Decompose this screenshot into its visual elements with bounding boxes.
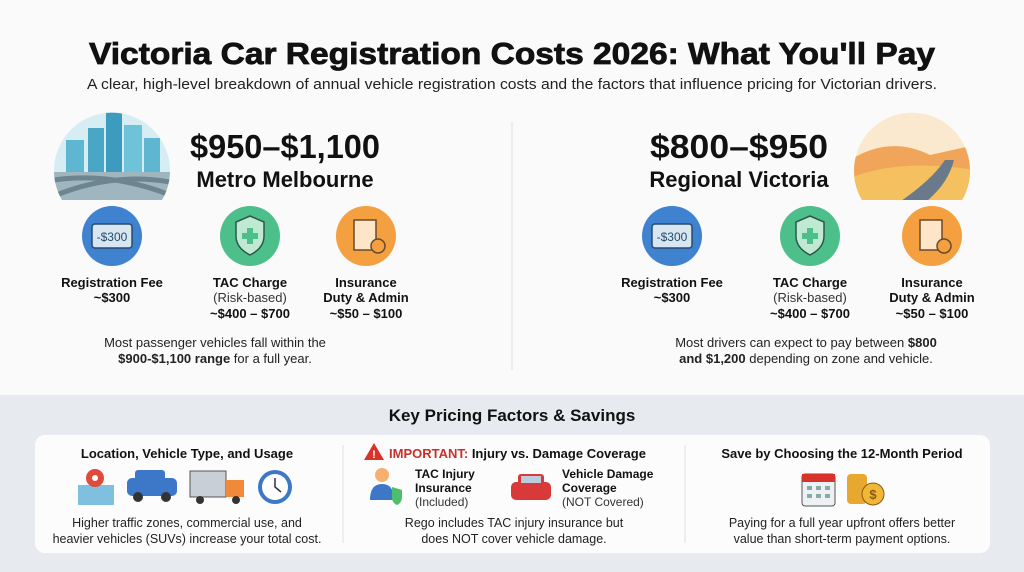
- note: regional: Most drivers can expect to pay between $800: [675, 335, 937, 350]
- text: registration fee: [61, 275, 163, 305]
- note: metro: Most passenger vehicles fall within the: [104, 335, 326, 350]
- column: location: Location, Vehicle Type, and Usage: [81, 446, 293, 461]
- text: registration fee: ~$300: [94, 290, 130, 305]
- column: important coverage: does NOT cover vehicle damage.: [421, 532, 607, 546]
- column: savings: [721, 446, 963, 546]
- panel: key pricing factors: [0, 395, 1024, 572]
- text: registration fee: [621, 275, 723, 305]
- column: important coverage: (Included): [415, 495, 468, 509]
- icon: map pin: [78, 469, 114, 505]
- text: TAC charge: [770, 275, 850, 321]
- text: insurance: Duty & Admin: [889, 290, 975, 305]
- text: TAC charge: TAC Charge: [213, 275, 287, 290]
- icon: warning: !: [372, 449, 376, 461]
- heading: key pricing factors: Key Pricing Factors & Savings: [389, 406, 635, 425]
- column: savings: Save by Choosing the 12-Month Period: [721, 446, 963, 461]
- text: insurance: Insurance: [335, 275, 397, 290]
- icon: TAC shield: [780, 206, 840, 266]
- column: important coverage: IMPORTANT: Injury vs. Damage Coverage: [389, 446, 646, 461]
- icon: person shield: [370, 468, 402, 505]
- icon: coins: [847, 474, 884, 505]
- note: metro: [104, 335, 326, 366]
- column: savings: value than short-term payment options.: [734, 532, 950, 546]
- text: TAC charge: TAC Charge: [773, 275, 847, 290]
- panel: metro melbourne: [50, 105, 409, 366]
- icon: registration fee: -$300: [97, 230, 128, 244]
- icon: coins: $: [869, 487, 877, 502]
- subtitle: A clear, high-level breakdown of annual vehicle registration costs and the factors that influence pricing for Victorian drivers.: [87, 76, 937, 93]
- column: important coverage: [364, 443, 654, 546]
- price: metro: $950–$1,100: [190, 128, 380, 165]
- icon: calendar: [802, 474, 835, 506]
- column: location: Higher traffic zones, commercial use, and: [72, 516, 302, 530]
- region label: regional: Regional Victoria: [649, 167, 829, 192]
- text: TAC charge: [210, 275, 290, 321]
- text: TAC charge: (Risk-based): [773, 290, 847, 305]
- note: regional: [675, 335, 937, 366]
- text: insurance: Insurance: [901, 275, 963, 290]
- icon: insurance doc: [336, 206, 396, 266]
- column: important coverage: Rego includes TAC injury insurance but: [405, 516, 624, 530]
- text: insurance: [323, 275, 409, 321]
- icon: registration fee: [82, 206, 142, 266]
- note: regional: and $1,200 depending on zone and vehicle.: [679, 351, 933, 366]
- region label: metro: Metro Melbourne: [196, 167, 374, 192]
- icon: damaged car: [511, 474, 551, 500]
- icon: insurance doc: [902, 206, 962, 266]
- note: metro: $900-$1,100 range for a full year.: [118, 351, 312, 366]
- column: savings: Paying for a full year upfront offers better: [729, 516, 955, 530]
- text: insurance: ~$50 – $100: [330, 306, 402, 321]
- icon: registration fee: -$300: [657, 230, 688, 244]
- icon: car: [127, 470, 177, 502]
- column: location: [53, 446, 321, 546]
- panel: regional victoria: [621, 105, 975, 366]
- icon: registration fee: [642, 206, 702, 266]
- icon: TAC shield: [220, 206, 280, 266]
- text: insurance: [889, 275, 975, 321]
- column: important coverage: Coverage: [562, 481, 617, 495]
- icon: countryside: [854, 112, 970, 200]
- price: regional: $800–$950: [650, 128, 828, 165]
- column: important coverage: Vehicle Damage: [562, 467, 654, 481]
- icon: clock: [258, 470, 292, 504]
- column: important coverage: TAC Injury: [415, 467, 475, 481]
- text: registration fee: ~$300: [654, 290, 690, 305]
- text: registration fee: Registration Fee: [61, 275, 163, 290]
- text: TAC charge: ~$400 – $700: [210, 306, 290, 321]
- text: TAC charge: ~$400 – $700: [770, 306, 850, 321]
- icon: truck: [190, 471, 244, 504]
- column: important coverage: Insurance: [415, 481, 472, 495]
- column: important coverage: (NOT Covered): [562, 495, 644, 509]
- text: insurance: ~$50 – $100: [896, 306, 968, 321]
- text: registration fee: Registration Fee: [621, 275, 723, 290]
- icon: city skyline: [54, 112, 170, 200]
- column: location: heavier vehicles (SUVs) increase your total cost.: [53, 532, 321, 546]
- text: insurance: Duty & Admin: [323, 290, 409, 305]
- text: TAC charge: (Risk-based): [213, 290, 287, 305]
- title: Victoria Car Registration Costs 2026: What You'll Pay: [89, 36, 936, 71]
- icon: warning: [364, 443, 384, 461]
